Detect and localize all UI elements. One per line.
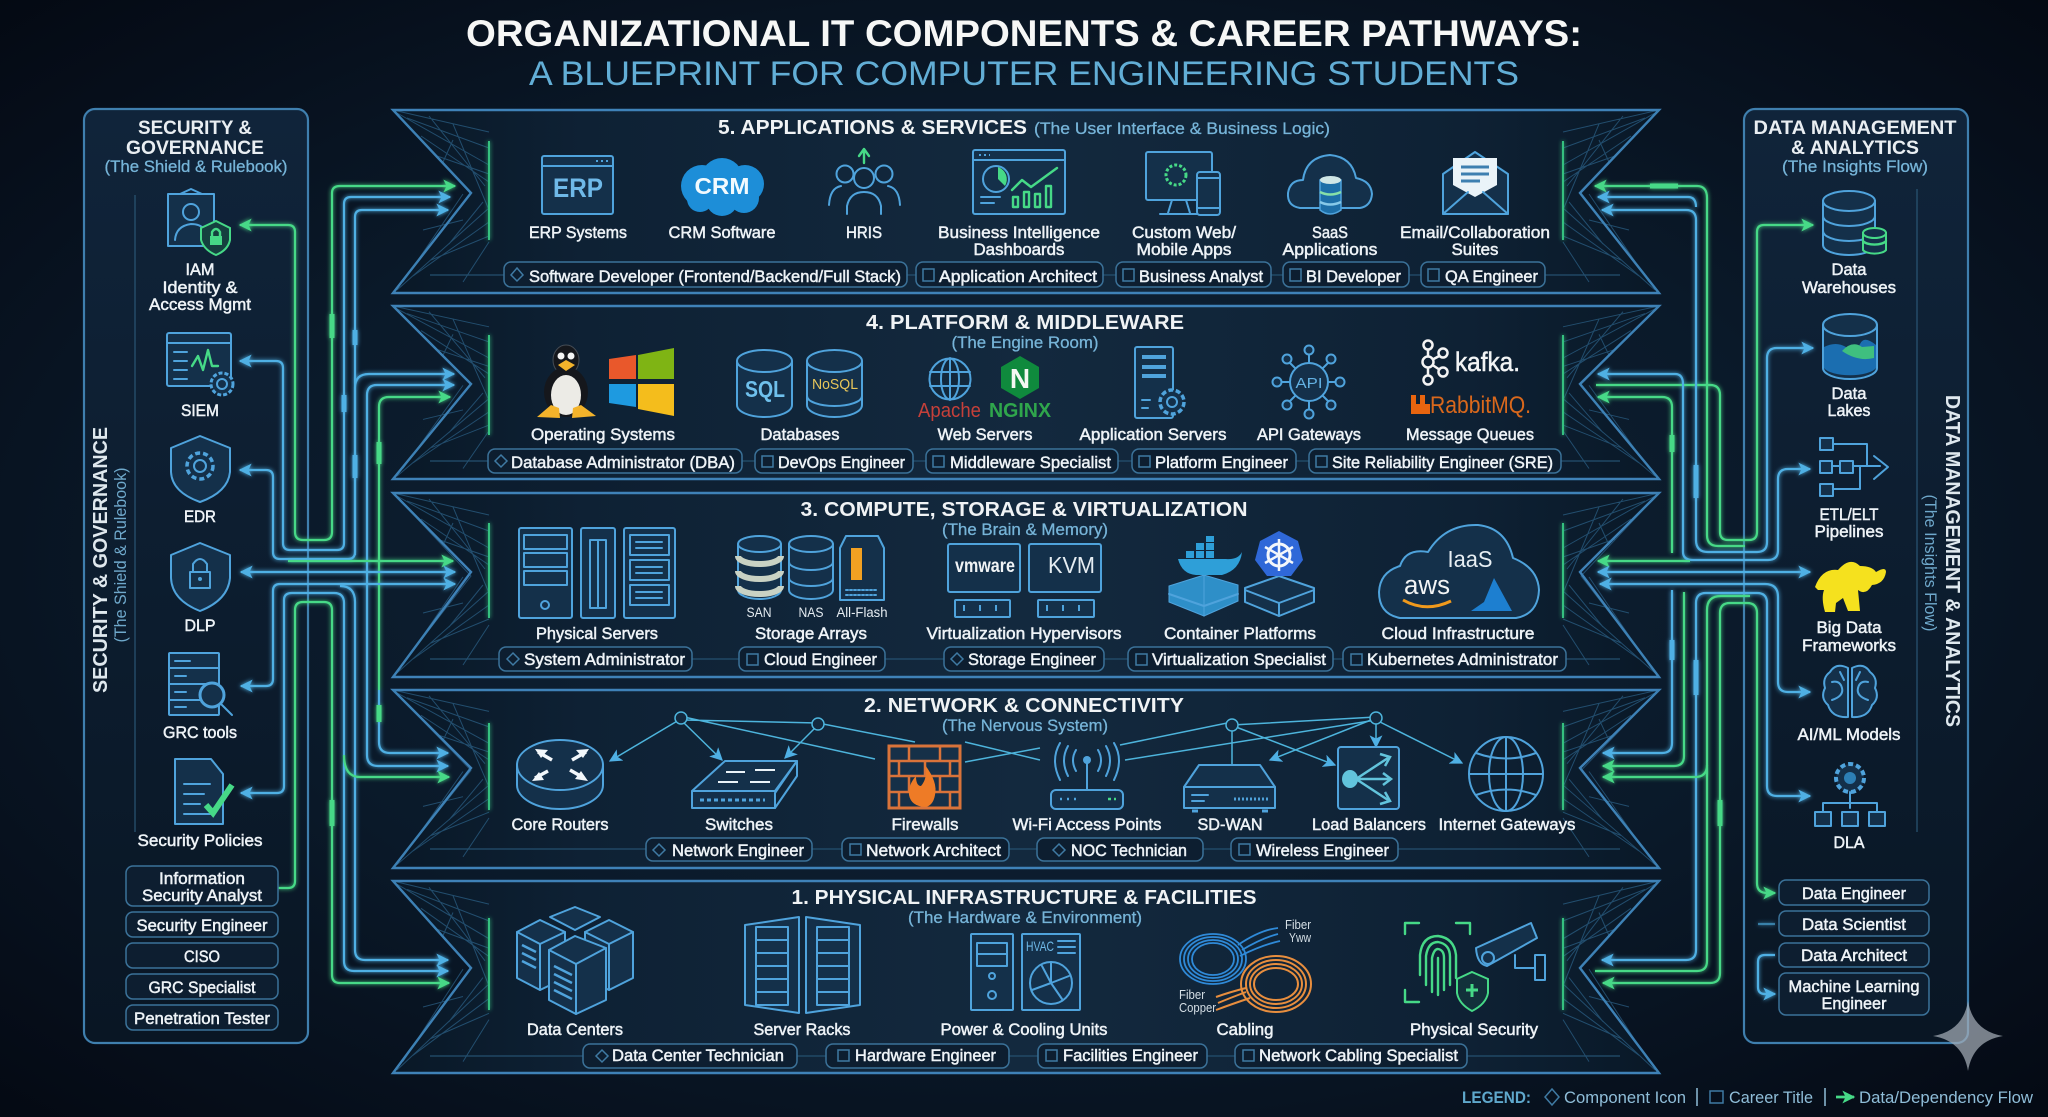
vertical panel title: SECURITY & GOVERNANCE <box>90 427 112 693</box>
career row: Network Cabling Specialist <box>1259 1046 1458 1065</box>
layer 4 content <box>488 312 1561 473</box>
career row <box>499 647 1566 671</box>
heading <box>504 887 1546 927</box>
label: IAM <box>149 260 251 314</box>
career row: Business Analyst <box>1139 267 1263 286</box>
label: security policies: Security Policies <box>138 831 262 850</box>
label: big data <box>1802 618 1896 655</box>
labels: Physical Servers <box>536 624 658 643</box>
label: ETL pipelines: ETL/ELT <box>1820 505 1878 524</box>
labels: Power & Cooling Units <box>940 1020 1108 1039</box>
panel heading: & ANALYTICS <box>1791 138 1919 159</box>
icon: DLP shield <box>171 543 230 611</box>
vertical panel subtitle: (The Insights Flow) <box>1921 494 1940 632</box>
label: ETL pipelines: Pipelines <box>1814 522 1884 541</box>
label: big data: Frameworks <box>1802 636 1896 655</box>
label: AI/ML models: AI/ML Models <box>1798 725 1900 744</box>
labels <box>512 815 1576 834</box>
arrow <box>653 967 725 969</box>
labels <box>529 223 1550 259</box>
label: data lakes: Lakes <box>1828 401 1870 420</box>
panel heading: (The Shield & Rulebook) <box>104 157 288 176</box>
icon: all-flash array <box>840 536 884 600</box>
icon: physical security <box>1405 923 1545 1011</box>
icon: core router <box>517 740 603 809</box>
icon: Apache globe <box>918 358 981 422</box>
icon: server racks <box>745 917 860 1013</box>
layer 1 content <box>504 887 1546 1068</box>
icon: Wi-Fi access point <box>1051 743 1123 809</box>
icon: VMware hypervisor: vmware <box>955 556 1015 577</box>
heading: 2. NETWORK & CONNECTIVITY <box>864 695 1185 717</box>
arrow <box>614 778 687 780</box>
heading: (The Engine Room) <box>952 333 1098 352</box>
career row: Wireless Engineer <box>1256 841 1389 860</box>
icon: load balancer <box>1338 747 1399 809</box>
career: data scientist <box>1779 911 1929 936</box>
panel heading: (The Insights Flow) <box>1782 157 1928 176</box>
labels <box>531 425 1534 444</box>
icon: CRM cloud <box>681 158 764 216</box>
label: data lakes <box>1828 384 1870 420</box>
arrow <box>880 967 951 969</box>
labels: Core Routers <box>512 815 608 834</box>
arrow <box>874 383 917 385</box>
icon: Kafka: kafka. <box>1455 347 1520 377</box>
watermark star <box>1933 1001 2003 1071</box>
layer 3 content <box>499 499 1566 671</box>
labels <box>536 624 1534 643</box>
heading: (The Brain & Memory) <box>942 520 1108 539</box>
title: ORGANIZATIONAL IT COMPONENTS & CAREER PATHWAYS: <box>466 13 1582 54</box>
vertical panel title: DATA MANAGEMENT & ANALYTICS <box>1941 395 1963 727</box>
career row: Cloud Engineer <box>764 650 877 669</box>
labels: SaaS <box>1312 223 1348 242</box>
icon: physical servers <box>519 528 675 618</box>
icon: ERP <box>542 156 613 214</box>
career: machine learning engineer: Engineer <box>1822 994 1887 1013</box>
labels: Operating Systems <box>531 425 675 444</box>
icon: data lakes <box>1823 314 1877 379</box>
career row: Platform Engineer <box>1155 453 1288 472</box>
labels: Data Centers <box>527 1020 623 1039</box>
labels: CRM Software <box>668 223 776 242</box>
icon: NoSQL cylinder <box>807 350 862 417</box>
icon: SD-WAN <box>1184 765 1275 811</box>
labels: Physical Security <box>1410 1020 1538 1039</box>
icon: ETL pipelines <box>1820 438 1888 496</box>
career: machine learning engineer <box>1779 973 1929 1015</box>
career row: NOC Technician <box>1071 841 1187 860</box>
career row: QA Engineer <box>1445 267 1538 286</box>
career: data scientist: Data Scientist <box>1802 915 1906 934</box>
career: information security analyst <box>126 866 278 906</box>
labels: Message Queues <box>1406 425 1534 444</box>
arrow <box>626 185 672 187</box>
career: machine learning engineer: Machine Learning <box>1788 977 1920 996</box>
content: security panel <box>90 118 288 1030</box>
heading: 1. PHYSICAL INFRASTRUCTURE & FACILITIES <box>792 887 1256 909</box>
heading <box>504 117 1546 139</box>
career row: Network Engineer <box>672 841 804 860</box>
label: IAM: Access Mgmt <box>149 295 251 314</box>
career row <box>504 262 1545 287</box>
labels: Container Platforms <box>1164 624 1316 643</box>
career row: Application Architect <box>939 267 1097 286</box>
panel heading: DATA MANAGEMENT <box>1754 118 1957 139</box>
icon: SQL cylinder <box>737 350 792 417</box>
arrow <box>1358 383 1401 385</box>
labels: API Gateways <box>1257 425 1361 444</box>
icon: SQL cylinder: SQL <box>745 376 785 402</box>
label: EDR: EDR <box>184 507 216 526</box>
arrow <box>1079 185 1135 187</box>
labels: Wi-Fi Access Points <box>1012 815 1162 834</box>
icon: KVM hypervisor <box>1029 544 1101 617</box>
legend: Career Title <box>1729 1088 1813 1107</box>
labels: Mobile Apps <box>1136 240 1232 259</box>
storage sublabels <box>746 605 888 620</box>
career: security engineer: Security Engineer <box>136 916 268 935</box>
icon: EDR shield <box>171 436 230 502</box>
career row: Data Center Technician <box>612 1046 784 1065</box>
panel heading: GOVERNANCE <box>126 138 264 159</box>
icon: HVAC unit <box>1022 934 1080 1010</box>
icon: Apache globe: Apache <box>918 400 981 422</box>
heading <box>504 499 1546 539</box>
heading: (The Hardware & Environment) <box>908 908 1142 927</box>
heading: 5. APPLICATIONS & SERVICES <box>718 117 1027 139</box>
band: compute storage virtualization <box>393 493 1659 677</box>
legend: Data/Dependency Flow <box>1859 1088 2034 1107</box>
career: GRC specialist <box>126 974 278 999</box>
arrow <box>1282 778 1330 780</box>
arrow <box>1326 576 1370 578</box>
label: big data: Big Data <box>1816 618 1882 637</box>
title <box>466 13 1582 93</box>
arrow <box>1408 778 1458 780</box>
labels: SD-WAN <box>1198 815 1262 834</box>
content: data panel <box>1754 118 1963 1015</box>
career row: System Administrator <box>524 650 685 669</box>
panel heading <box>104 118 288 176</box>
icon: VMware hypervisor <box>948 544 1020 617</box>
arrow <box>1232 185 1278 187</box>
icon: NGINX: N <box>1010 363 1030 394</box>
legend <box>1462 1088 2034 1107</box>
layer 5 content <box>504 117 1550 287</box>
career row: Site Reliability Engineer (SRE) <box>1332 453 1553 472</box>
arrow <box>686 576 727 578</box>
labels: Firewalls <box>892 815 958 834</box>
career row: Software Developer (Frontend/Backend/Full Stack) <box>529 267 901 286</box>
arrow <box>969 778 1044 780</box>
icon: cabling: Fiber <box>1285 917 1312 932</box>
icon: SAN cylinder <box>738 536 781 599</box>
icon: NGINX <box>989 356 1052 422</box>
icon: NAS cylinder <box>789 536 833 599</box>
icon: GRC tools <box>169 653 232 715</box>
legend: LEGEND: <box>1462 1088 1531 1107</box>
icon: Kubernetes platform <box>1245 531 1314 616</box>
title: A BLUEPRINT FOR COMPUTER ENGINEERING STUDENTS <box>529 55 1519 93</box>
storage sublabels: SAN <box>746 605 772 620</box>
icon: data warehouses <box>1823 191 1886 255</box>
arrow <box>805 778 880 780</box>
labels: HRIS <box>846 223 882 242</box>
career: data engineer <box>1779 880 1929 905</box>
arrow <box>895 576 937 578</box>
arrow <box>1325 967 1391 969</box>
icon: custom web and mobile apps <box>1146 152 1220 215</box>
icon: cabling: Fiber <box>1179 987 1206 1002</box>
labels: Web Servers <box>938 425 1032 444</box>
icon: API gateway: API <box>1296 375 1322 392</box>
labels: Suites <box>1452 240 1498 259</box>
band: applications and services <box>393 110 1659 293</box>
heading <box>504 695 1546 735</box>
icon: data centers <box>517 907 633 1014</box>
heading: 3. COMPUTE, STORAGE & VIRTUALIZATION <box>800 499 1248 521</box>
labels <box>527 1020 1538 1039</box>
label: data warehouses <box>1802 260 1896 297</box>
label: ETL pipelines <box>1814 505 1884 541</box>
career: information security analyst: Security Analyst <box>142 886 262 905</box>
career row: Kubernetes Administrator <box>1367 650 1558 669</box>
icon: Windows logo <box>609 348 674 416</box>
icon: internet gateway globe <box>1469 737 1543 811</box>
career row: Facilities Engineer <box>1063 1046 1198 1065</box>
icon: Docker container platform <box>1169 536 1242 616</box>
icon: cloud infrastructure: IaaS <box>1448 546 1492 572</box>
heading: 4. PLATFORM & MIDDLEWARE <box>866 312 1184 334</box>
icon: big data elephant <box>1815 562 1886 612</box>
icon: NGINX: NGINX <box>989 400 1052 422</box>
labels: Cabling <box>1216 1020 1274 1039</box>
legend: Component Icon <box>1564 1088 1686 1107</box>
arrow <box>1054 383 1126 385</box>
career: data architect <box>1779 943 1929 967</box>
icon: cabling <box>1179 917 1312 1015</box>
labels: Virtualization Hypervisors <box>926 624 1122 643</box>
career: penetration tester: Penetration Tester <box>134 1009 270 1028</box>
icon: IAM <box>168 189 230 255</box>
career row <box>583 1044 1467 1068</box>
icon: BI dashboard <box>973 150 1065 214</box>
career: GRC specialist: GRC Specialist <box>148 978 256 997</box>
arrow <box>1192 383 1260 385</box>
labels: Storage Arrays <box>755 624 867 643</box>
icon: cloud infrastructure <box>1379 525 1539 618</box>
icon: HRIS people <box>829 149 900 214</box>
band: physical infrastructure <box>393 881 1659 1073</box>
arrow <box>1113 576 1158 578</box>
labels: Application Servers <box>1080 425 1226 444</box>
icon: application server <box>1135 347 1184 418</box>
icon: NoSQL cylinder: NoSQL <box>812 376 858 393</box>
flow lines: security side <box>240 186 455 983</box>
arrow <box>774 185 819 187</box>
labels: Dashboards <box>974 240 1064 259</box>
heading: (The Nervous System) <box>942 716 1108 735</box>
label: SIEM: SIEM <box>181 401 219 420</box>
storage sublabels: NAS <box>798 605 824 620</box>
labels: Cloud Infrastructure <box>1382 624 1534 643</box>
storage sublabels: All-Flash <box>836 605 888 620</box>
labels: Internet Gateways <box>1438 815 1576 834</box>
career row: BI Developer <box>1306 267 1401 286</box>
label: DLA: DLA <box>1834 833 1865 852</box>
icon: SaaS cloud <box>1288 155 1372 214</box>
icon: cloud infrastructure: aws <box>1404 570 1450 600</box>
label: data lakes: Data <box>1832 384 1867 403</box>
icon: cabling: Copper <box>1179 1000 1217 1015</box>
arrow <box>685 383 727 385</box>
icon: SIEM <box>167 333 233 395</box>
icon: CRM cloud: CRM <box>694 173 750 199</box>
career row: DevOps Engineer <box>778 453 905 472</box>
panel: data management and analytics <box>1744 109 1968 1043</box>
icon: cabling: Yww <box>1289 930 1311 945</box>
icon: brain <box>1823 666 1877 717</box>
label: data warehouses: Warehouses <box>1802 278 1896 297</box>
labels: Server Racks <box>754 1020 850 1039</box>
career row: Middleware Specialist <box>950 453 1111 472</box>
career row: Hardware Engineer <box>855 1046 996 1065</box>
career row: Virtualization Specialist <box>1152 650 1326 669</box>
labels: Business Intelligence <box>938 223 1100 242</box>
career: CISO: CISO <box>184 947 220 966</box>
panel heading <box>1754 118 1957 176</box>
career: security engineer <box>126 912 278 937</box>
icon: KVM hypervisor: KVM <box>1048 552 1095 578</box>
icon: security policies <box>175 759 232 824</box>
career: CISO <box>126 943 278 968</box>
icon: Kafka <box>1422 340 1520 384</box>
labels: Load Balancers <box>1312 815 1426 834</box>
panel heading: SECURITY & <box>138 118 252 139</box>
vertical panel subtitle: (The Shield & Rulebook) <box>111 468 130 642</box>
arrow <box>1097 967 1166 969</box>
panel: security and governance <box>84 109 308 1043</box>
heading: (The User Interface & Business Logic) <box>1034 119 1330 138</box>
icon: firewall <box>889 746 960 808</box>
career row: Storage Engineer <box>968 650 1096 669</box>
icon: power unit <box>971 934 1013 1010</box>
icon: switch <box>692 761 797 808</box>
career: penetration tester <box>126 1005 278 1030</box>
icon: ERP: ERP <box>553 173 603 203</box>
arrow <box>911 185 961 187</box>
icon: DLA <box>1815 764 1885 826</box>
arrow <box>1128 778 1178 780</box>
label: data warehouses: Data <box>1832 260 1867 279</box>
label: IAM: Identity & <box>162 278 238 297</box>
heading <box>504 312 1546 352</box>
labels: Switches <box>705 815 773 834</box>
label: DLP: DLP <box>184 616 216 635</box>
labels: Databases <box>760 425 840 444</box>
band: platform and middleware <box>393 306 1659 479</box>
label: IAM: IAM <box>186 260 214 279</box>
icon: HVAC unit: HVAC <box>1026 938 1054 954</box>
icon: email <box>1443 152 1508 214</box>
labels: Custom Web/ <box>1132 223 1236 242</box>
label: GRC tools: GRC tools <box>163 723 237 742</box>
arrow <box>1383 185 1431 187</box>
career row <box>488 449 1561 473</box>
labels: Email/Collaboration <box>1400 223 1550 242</box>
icon: API gateway <box>1272 346 1344 418</box>
career: data engineer: Data Engineer <box>1802 884 1906 903</box>
career: information security analyst: Information <box>159 869 245 888</box>
career row <box>646 838 1398 861</box>
flow lines: data side <box>1595 186 1813 994</box>
career: data architect: Data Architect <box>1801 946 1907 965</box>
icon: RabbitMQ: RabbitMQ. <box>1430 392 1531 419</box>
network mesh links <box>610 712 1462 765</box>
career row: Network Architect <box>866 841 1001 860</box>
career row: Database Administrator (DBA) <box>511 453 735 472</box>
labels: ERP Systems <box>529 223 627 242</box>
icon: Linux penguin <box>537 345 596 418</box>
layer 2 content <box>504 695 1576 861</box>
band: network and connectivity <box>393 690 1659 868</box>
labels: Applications <box>1282 240 1378 259</box>
